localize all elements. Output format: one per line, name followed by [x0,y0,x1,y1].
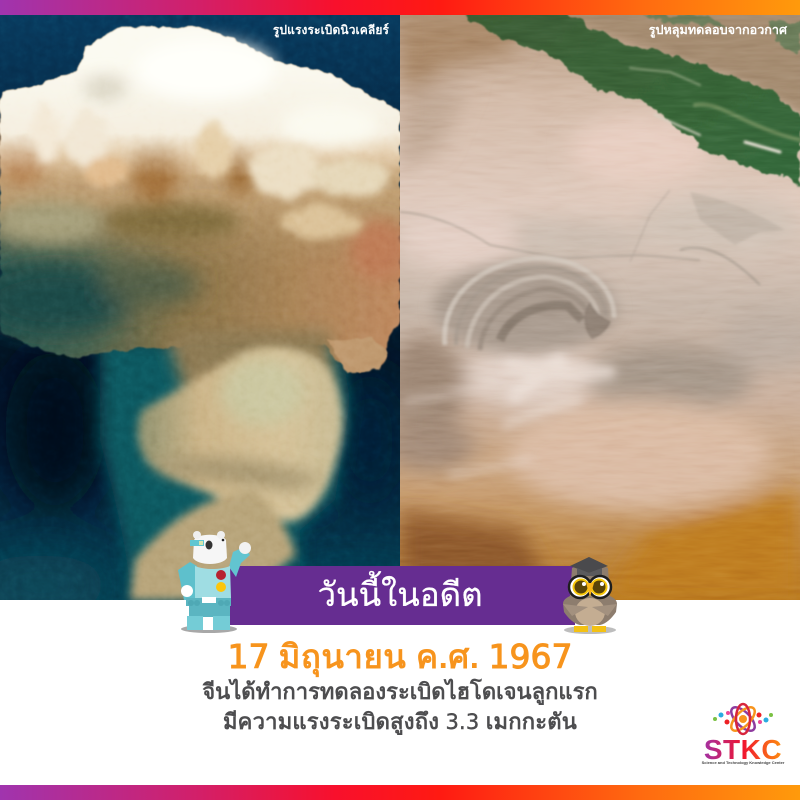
cloud shading [0,120,410,280]
stem bulbs [130,347,343,600]
white crown [0,27,400,190]
logo: STKC [702,702,784,765]
texture [0,15,400,600]
teal stem shadow [100,340,350,600]
green mountain ridge [457,10,800,185]
caption: left photo: รูปแรงระเบิดนิวเคลียร์ [273,23,389,37]
icon: owl with graduation cap [563,557,617,634]
photo: nuclear mushroom cloud [0,15,400,600]
tan land above ridge [540,10,800,120]
photo: test crater from space [400,15,800,600]
description text: จีนได้ทำการทดลองระเบิดไฮโดเจนลูกแรก [202,679,598,704]
bottom gradient bar [0,785,800,800]
top gradient bar [0,0,800,15]
white salt streaks [405,360,610,475]
under-cap mass [0,190,400,372]
plains faults [400,190,785,285]
logo wordmark: STKC [704,734,782,765]
description text [202,678,598,735]
logo tagline: Science and Technology Knowledge Center [702,760,784,765]
description text: มีความแรงระเบิดสูงถึง 3.3 เมกกะตัน [223,709,577,734]
title: วันนี้ในอดีต [318,576,482,613]
icon: polar bear robot mascot [178,531,251,633]
purple title banner [230,566,575,625]
right blob [328,338,388,372]
surface texture [400,15,800,600]
cloud cap body [0,27,400,290]
dark and teal sky patches [0,350,440,620]
icon: atom [713,702,773,736]
billow lobes [31,102,390,239]
crater swirl [433,262,617,354]
date heading: 17 มิถุนายน ค.ศ. 1967 [227,637,573,676]
stem neck [165,330,335,410]
terrain patches [385,15,800,600]
ridge highlights [630,68,800,152]
dark green underside left [0,265,200,334]
caption: right photo: รูปหลุมทดลอบจากอวกาศ [649,23,787,37]
